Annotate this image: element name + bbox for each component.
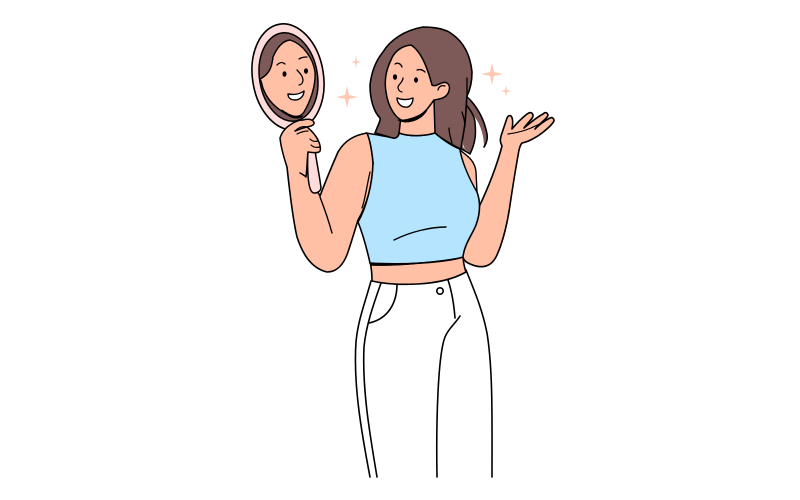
- hand gripping mirror: [280, 119, 320, 178]
- reflected face: [260, 40, 315, 116]
- reflected chin shadow: [282, 110, 303, 118]
- shirt fold: [394, 227, 446, 240]
- face: [385, 45, 449, 122]
- eyes: [393, 74, 397, 80]
- hair: [370, 27, 472, 149]
- right shoulder skin: [460, 150, 477, 192]
- button: [437, 288, 443, 294]
- left arm: [281, 133, 373, 272]
- sparkles: [336, 56, 511, 108]
- white jeans: [355, 270, 492, 477]
- sleeveless top: [358, 133, 480, 266]
- fly seam: [448, 280, 455, 318]
- white gap between hair locks: [462, 140, 468, 152]
- hair side lock: [460, 103, 475, 154]
- brows and nose: [395, 63, 445, 92]
- hand mirror: [245, 19, 331, 135]
- reflected brows and nose: [277, 57, 307, 85]
- smile: [397, 98, 413, 107]
- mirror handle: [308, 150, 321, 193]
- hair lines: [449, 78, 467, 143]
- hair outer strand: [463, 96, 487, 147]
- reflected smile: [288, 91, 304, 100]
- palm crease: [508, 121, 545, 134]
- fingers: [295, 127, 320, 147]
- inner elbow line: [320, 197, 332, 233]
- hand outline: [280, 119, 320, 177]
- shirt hem shadow: [370, 257, 463, 266]
- reflected eyes: [282, 71, 286, 77]
- armpit line: [362, 172, 370, 208]
- right arm and open hand: [462, 113, 554, 267]
- bare midriff: [370, 255, 466, 284]
- neck: [399, 100, 435, 136]
- chin shadow: [398, 110, 427, 122]
- pocket: [369, 284, 397, 323]
